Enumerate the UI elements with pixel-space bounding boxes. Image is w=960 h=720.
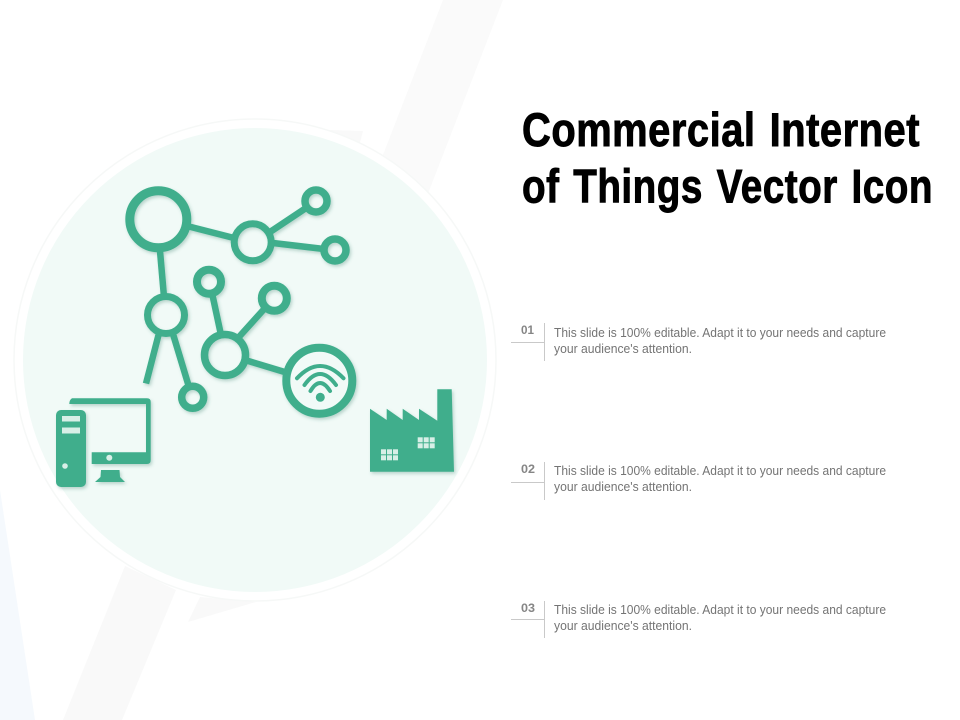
text 01: your audience's attention.: [554, 341, 692, 356]
text 03: This slide is 100% editable. Adapt it to your needs and capture: [554, 602, 886, 617]
icon: desktop computer: [56, 398, 151, 487]
panel: background circle: [14, 119, 496, 601]
tower slots: [62, 416, 80, 469]
text 02: This slide is 100% editable. Adapt it to your needs and capture: [554, 463, 886, 478]
item 01: [511, 323, 886, 361]
node: large hub: [130, 191, 187, 248]
node: upper branch: [234, 224, 271, 261]
node: center: [204, 334, 246, 376]
node: center top small: [197, 270, 221, 294]
icon: network of connected nodes: [130, 190, 346, 408]
monitor stand: [95, 470, 125, 482]
node: right small: [324, 239, 346, 261]
factory window right: [418, 437, 435, 448]
text 01: [554, 325, 886, 356]
node: center right small: [262, 286, 287, 311]
number 02: 02: [521, 462, 535, 476]
text 02: your audience's attention.: [554, 479, 692, 494]
icon: factory: [370, 389, 454, 472]
text 03: your audience's attention.: [554, 618, 692, 633]
number 03: 03: [521, 601, 535, 615]
node: bottom small: [182, 386, 204, 408]
connecting lines: [146, 208, 324, 387]
icon: wifi circle: [286, 348, 352, 414]
factory window left: [381, 449, 398, 460]
monitor: [69, 398, 151, 464]
number 01: 01: [521, 323, 534, 337]
node: left middle: [148, 296, 184, 334]
item 02: [511, 462, 886, 500]
item 03: [511, 601, 886, 638]
text 03: [554, 602, 886, 633]
text 01: This slide is 100% editable. Adapt it to your needs and capture: [554, 325, 886, 340]
title: [522, 103, 933, 212]
monitor button: [106, 455, 112, 461]
node: upper right small: [305, 190, 327, 212]
text 02: [554, 463, 886, 494]
computer tower: [56, 410, 86, 487]
